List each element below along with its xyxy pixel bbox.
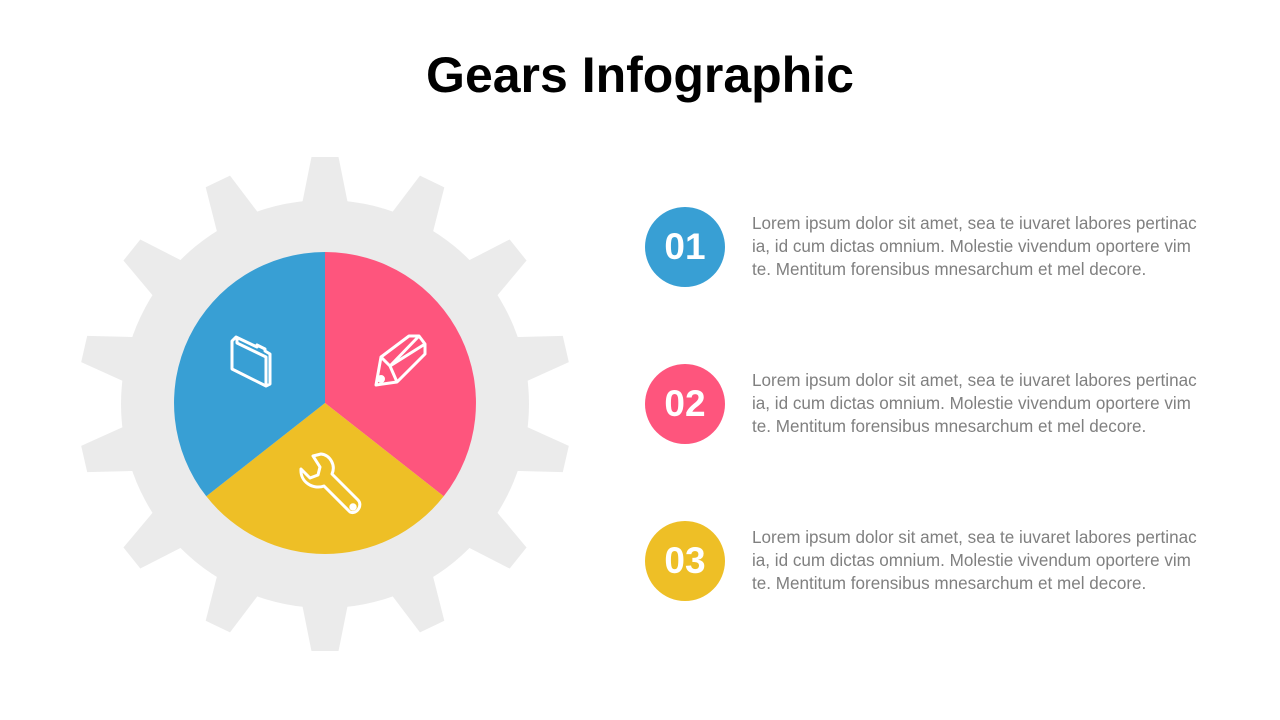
- text 03: te. Mentitum forensibus mnesarchum et mel decore.: [752, 574, 1146, 593]
- pie segment: pink: [325, 252, 476, 496]
- item 03: [645, 521, 1197, 601]
- text 02: Lorem ipsum dolor sit amet, sea te iuvaret labores pertinac: [752, 371, 1197, 390]
- title: Gears Infographic: [426, 47, 854, 103]
- pie segment: blue: [174, 252, 325, 496]
- icon: pencil: [376, 336, 425, 385]
- pie segment: yellow: [206, 403, 444, 554]
- text 02: ia, id cum dictas omnium. Molestie vivendum oportere vim: [752, 394, 1191, 413]
- icon: folder: [232, 337, 270, 386]
- text 01: te. Mentitum forensibus mnesarchum et mel decore.: [752, 260, 1146, 279]
- badge 02: 02: [664, 383, 706, 424]
- text 02: te. Mentitum forensibus mnesarchum et mel decore.: [752, 417, 1146, 436]
- item 02: [645, 364, 1197, 444]
- text 02: [752, 371, 1197, 436]
- gear background: [79, 157, 571, 651]
- text 03: [752, 528, 1197, 593]
- text 03: ia, id cum dictas omnium. Molestie vivendum oportere vim: [752, 551, 1191, 570]
- text 01: [752, 214, 1197, 279]
- text 03: Lorem ipsum dolor sit amet, sea te iuvaret labores pertinac: [752, 528, 1197, 547]
- text 01: ia, id cum dictas omnium. Molestie vivendum oportere vim: [752, 237, 1191, 256]
- badge 02: [645, 364, 725, 444]
- badge 03: 03: [664, 540, 706, 581]
- badge 03: [645, 521, 725, 601]
- badge 01: [645, 207, 725, 287]
- text 01: Lorem ipsum dolor sit amet, sea te iuvaret labores pertinac: [752, 214, 1197, 233]
- badge 01: 01: [664, 226, 706, 267]
- icon: wrench: [301, 454, 360, 513]
- item 01: [645, 207, 1197, 287]
